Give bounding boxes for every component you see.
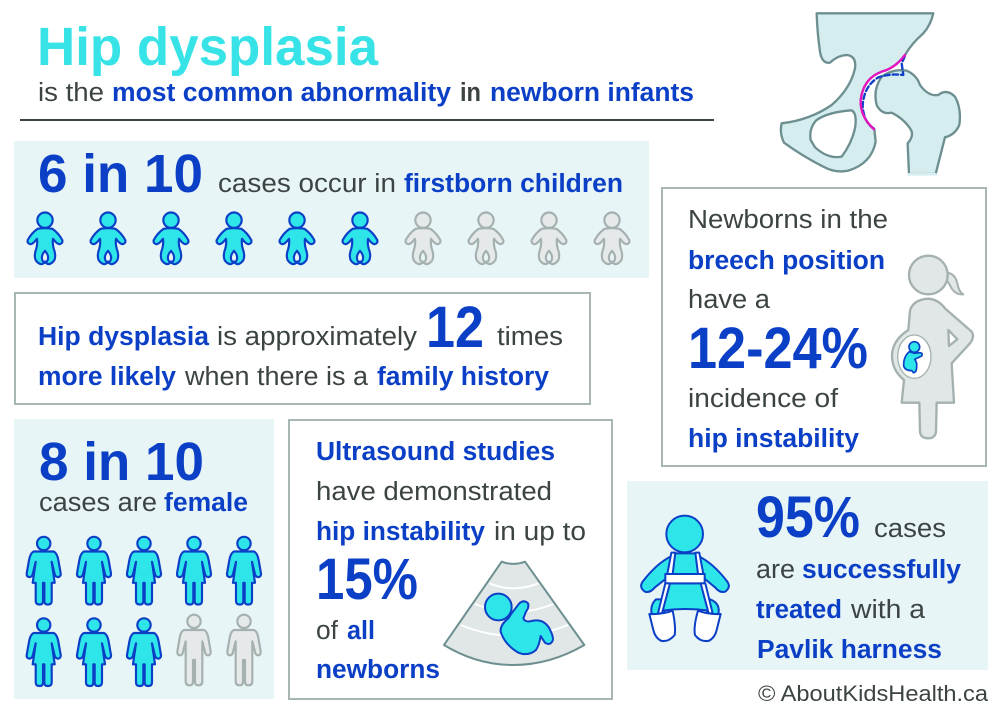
- panel: ultrasound: Ultrasound studies: [316, 438, 555, 466]
- icon: ultrasound scan: [444, 562, 584, 665]
- caption: female: female: [164, 489, 248, 517]
- panel: firstborn: [14, 141, 649, 278]
- panel: Pavlik harness: treated: [756, 596, 842, 624]
- subtitle: [38, 79, 694, 107]
- icon: baby in harness: [641, 516, 729, 641]
- caption: female: cases are: [39, 489, 157, 517]
- statistic: 12-24%: 12-24%: [688, 316, 868, 381]
- panel: female: [14, 419, 274, 699]
- panel: ultrasound: have demonstrated: [316, 478, 552, 506]
- panel: breech position: breech position: [688, 247, 885, 275]
- panel: breech position: have a: [688, 286, 771, 314]
- panel: breech position: Newborns in the: [688, 206, 888, 234]
- panel: Pavlik harness: successfully: [802, 556, 962, 584]
- caption: female: [39, 489, 248, 517]
- statistic: 8 in 10: 8 in 10: [39, 432, 204, 492]
- subtitle: newborn infants: [490, 79, 694, 107]
- subtitle: most common abnormality: [112, 79, 452, 107]
- panel: breech position: hip instability: [688, 425, 860, 453]
- title: Hip dysplasia: [37, 17, 379, 77]
- panel: ultrasound: in up to: [494, 518, 586, 546]
- statistic: 15%: 15%: [316, 547, 418, 612]
- panel: Pavlik harness: are: [756, 556, 795, 584]
- panel: family history: when there is a: [184, 363, 369, 391]
- panel: family history: Hip dysplasia: [38, 323, 210, 351]
- statistic: 6 in 10: 6 in 10: [38, 144, 203, 204]
- subtitle: in: [460, 79, 481, 107]
- panel: ultrasound: newborns: [316, 656, 440, 684]
- panel: family history: family history: [377, 363, 550, 391]
- caption: firstborn: firstborn children: [404, 170, 623, 198]
- panel: family history: more likely: [38, 363, 177, 391]
- statistic: 95%: 95%: [756, 485, 860, 550]
- statistic: 12 times: 12: [426, 295, 484, 360]
- icons: eight women and two men: [27, 537, 261, 686]
- icon: pregnant woman: [892, 256, 973, 438]
- panel: ultrasound: all: [347, 617, 375, 645]
- caption: firstborn: [218, 170, 623, 198]
- panel: family history: [15, 293, 590, 404]
- copyright: © AboutKidsHealth.ca: [758, 681, 989, 706]
- panel: breech position: [662, 188, 986, 466]
- panel: family history: times: [497, 323, 563, 351]
- panel: breech position: incidence of: [688, 385, 839, 413]
- panel: ultrasound: [289, 420, 612, 699]
- subtitle: is the: [38, 79, 104, 107]
- panel: ultrasound: of: [316, 617, 339, 645]
- panel: ultrasound: hip instability: [316, 518, 486, 546]
- panel: Pavlik harness: Pavlik harness: [757, 636, 942, 664]
- panel: Pavlik harness: with a: [850, 596, 926, 624]
- caption: firstborn: cases occur in: [218, 170, 396, 198]
- icons: ten babies, six highlighted: [28, 213, 629, 264]
- panel: Pavlik harness: [627, 481, 988, 670]
- panel: family history: is approximately: [217, 323, 417, 351]
- illustration: hip joint: [781, 13, 960, 174]
- panel: Pavlik harness: cases: [874, 515, 946, 543]
